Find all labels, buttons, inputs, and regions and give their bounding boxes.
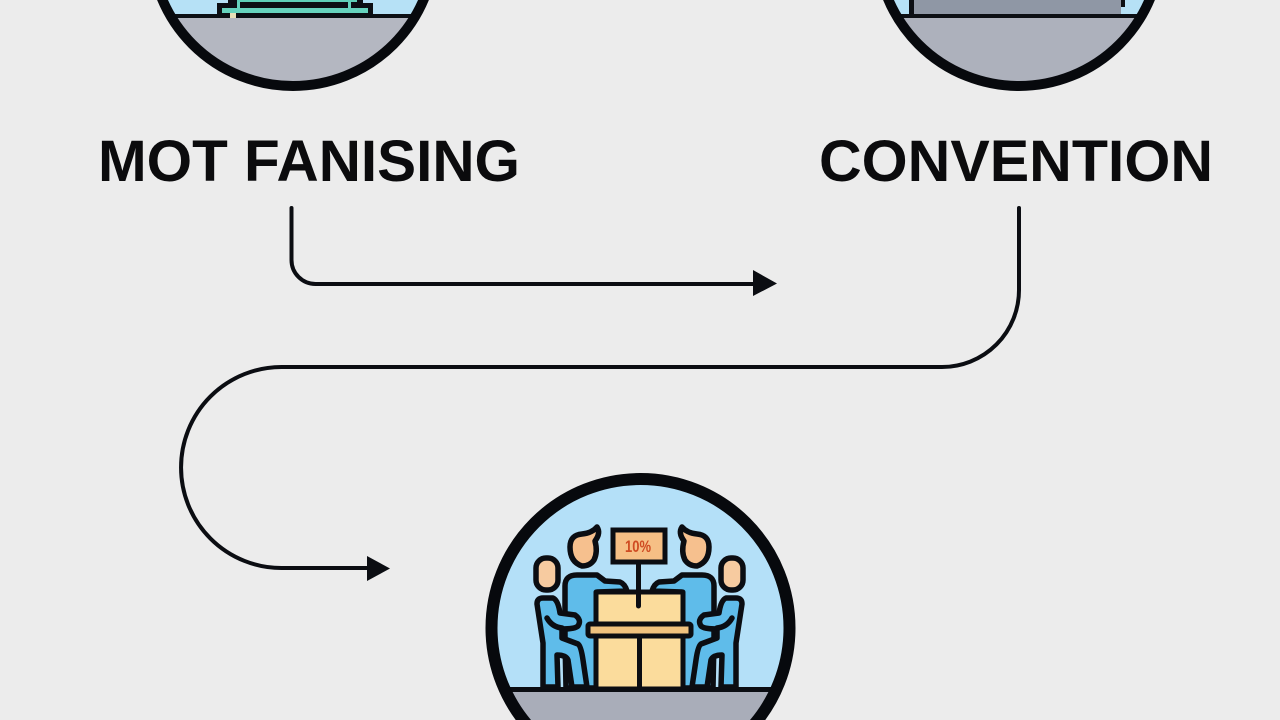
icon: bottom circle with people around a table: [480, 470, 800, 720]
front person arm crease: [547, 618, 562, 628]
people on the left: [536, 527, 627, 688]
sign with percentage: [613, 530, 665, 562]
heading: CONVENTION: CONVENTION: [819, 129, 1213, 194]
arrow: MOT FANISING to CONVENTION: [292, 208, 777, 296]
back person head: [570, 527, 599, 566]
back person body: [565, 575, 627, 688]
icon: top-right circle with building: [883, 0, 1155, 91]
front person body: [537, 598, 587, 687]
icon: top-left circle with building: [157, 0, 429, 91]
table box: [588, 562, 691, 689]
sign with percentage: 10%: [625, 537, 651, 556]
arrow: CONVENTION to negotiation icon: [181, 208, 1019, 581]
heading: MOT FANISING: MOT FANISING: [98, 129, 520, 194]
people on the right, mirrored: [652, 527, 743, 688]
front person head: [536, 558, 558, 590]
